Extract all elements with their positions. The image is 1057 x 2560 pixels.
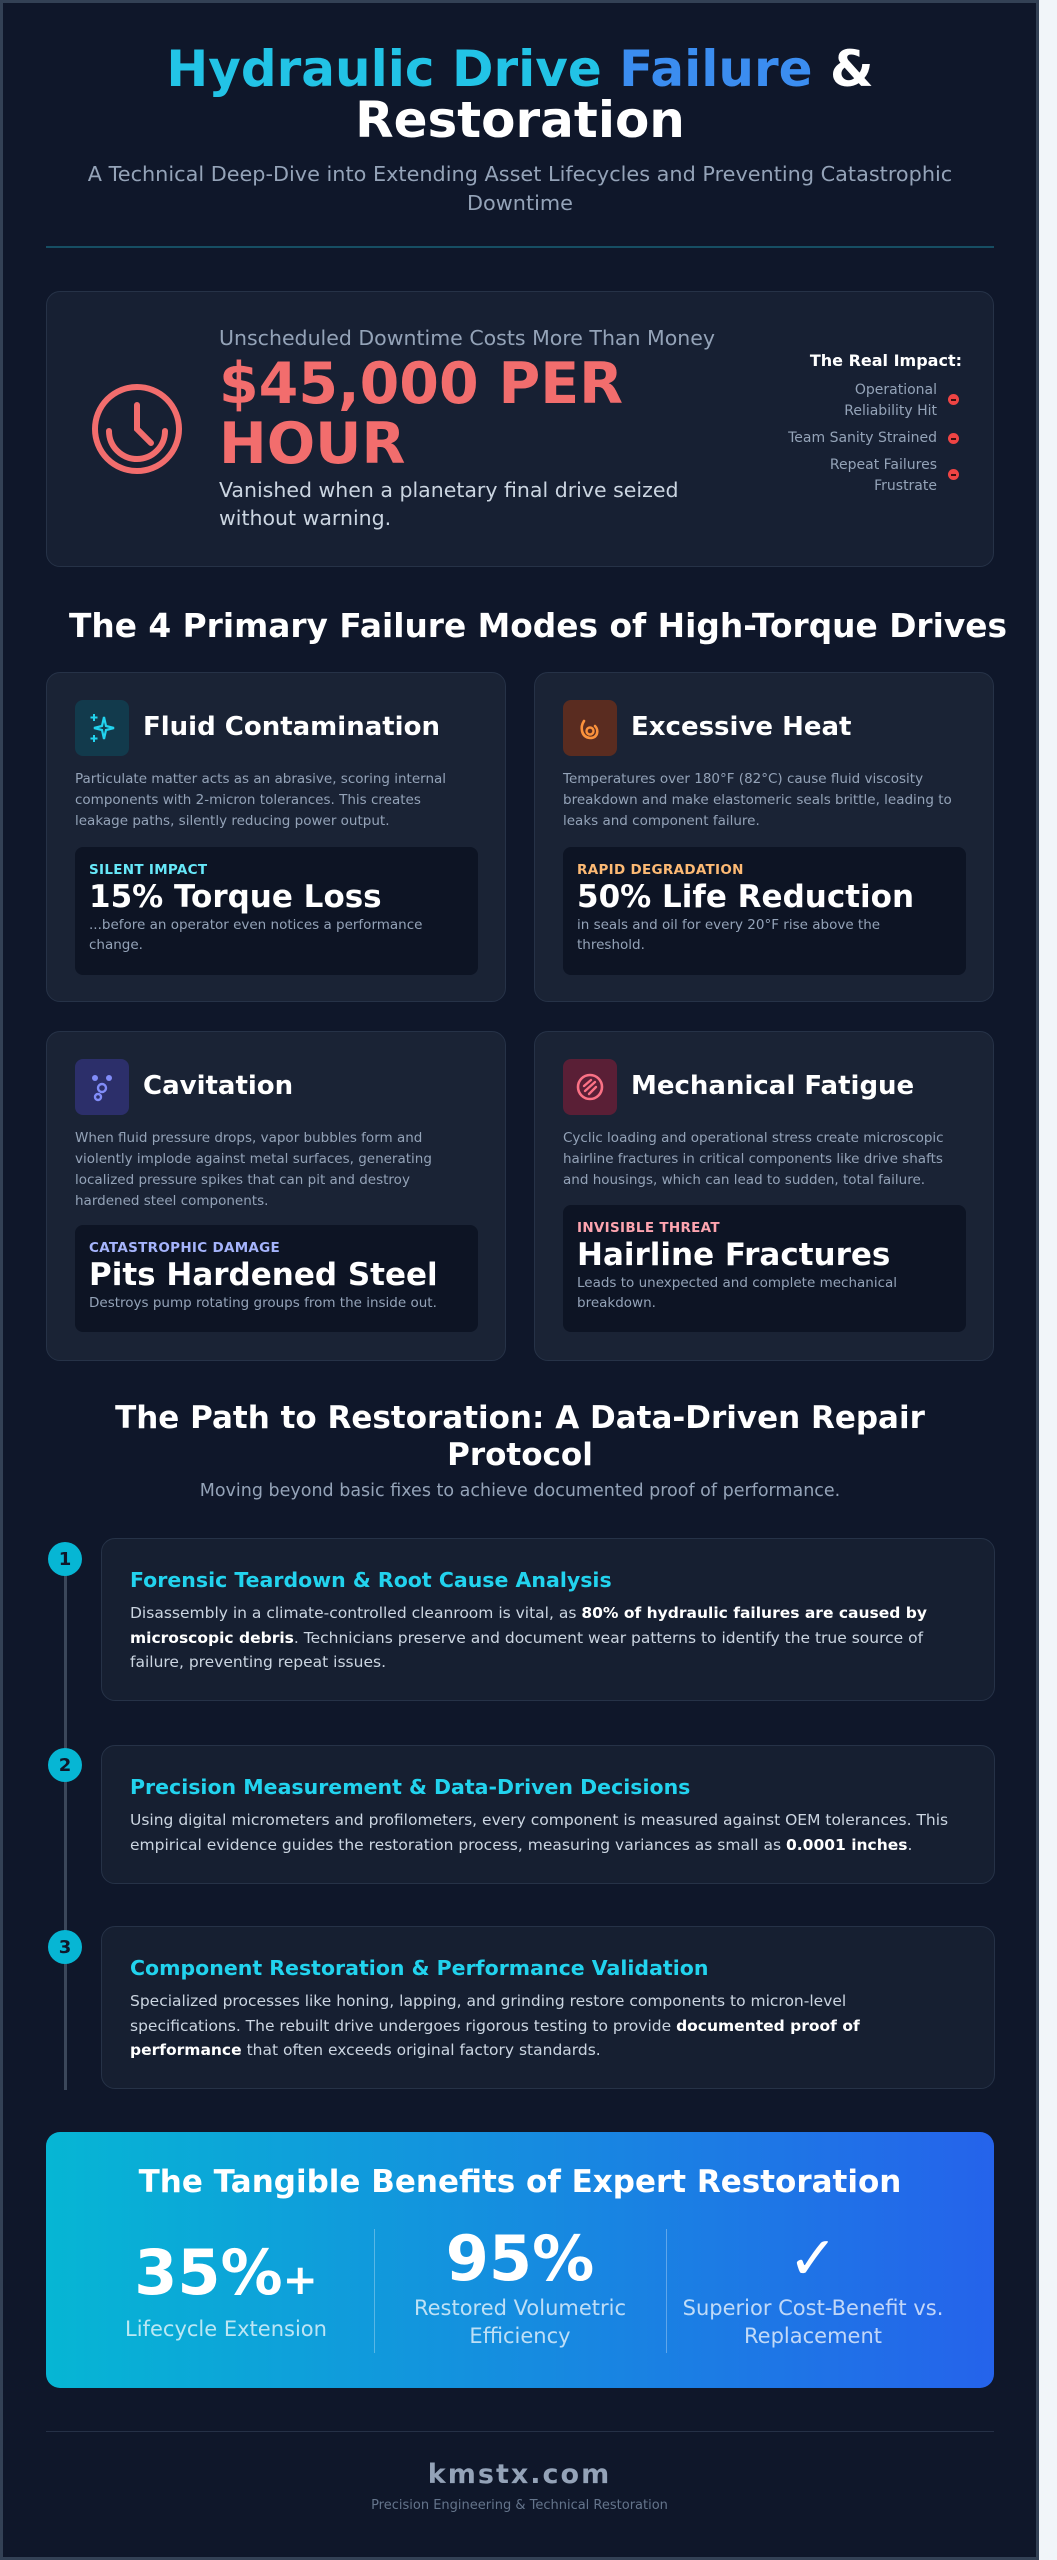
panel: fluid contamination: Fluid Contamination (143, 712, 440, 742)
callout: catastrophic damage: CATASTROPHIC DAMAGE (89, 1240, 280, 1256)
stat: volumetric efficiency (414, 2222, 626, 2348)
list: the real impact: Operational (855, 382, 937, 398)
panel: cavitation: Cavitation (143, 1071, 293, 1101)
callout: silent impact: 15% Torque Loss (89, 879, 382, 915)
callout: rapid degradation (563, 847, 966, 975)
callout: catastrophic damage: Destroys pump rotating groups from the inside out. (89, 1295, 437, 1311)
stat: lifecycle extension: 35%+ (134, 2236, 318, 2309)
callout: silent impact: ...before an operator even notices a performance change. (89, 917, 422, 953)
callout: rapid degradation: in seals and oil for every 20°F rise above the threshold. (577, 917, 880, 953)
step 3 marker (48, 1930, 82, 1964)
icon: bubbles (75, 1059, 129, 1115)
subheading: Moving beyond basic fixes to achieve documented proof of performance. (200, 1481, 840, 1501)
icon: sparkle (75, 700, 129, 756)
step 2 card: Precision Measurement & Data-Driven Decisions (130, 1775, 690, 1799)
footer: kmstx.com (428, 2459, 611, 2490)
callout: silent impact (75, 847, 478, 975)
stat: cost-benefit: ✓ (788, 2224, 838, 2294)
step 2 marker: 2 (59, 1754, 71, 1776)
callout: silent impact: SILENT IMPACT (89, 862, 207, 878)
panel: excessive heat (534, 672, 994, 1002)
stat: lifecycle extension (125, 2236, 327, 2341)
callout: invisible threat: INVISIBLE THREAT (577, 1220, 720, 1236)
panel: mechanical fatigue (534, 1031, 994, 1361)
step 3 card: Specialized processes like honing, lapping, and grinding restore components to micron-level specifications. The rebuilt drive undergoes rigorous testing to provide documented proof of performance that often exceeds original factory standards. (130, 1992, 860, 2059)
footer (371, 2459, 668, 2513)
heading: failure modes: The 4 Primary Failure Modes of High-Torque Drives (69, 607, 1007, 645)
step 1 marker (48, 1542, 82, 1576)
subtitle: A Technical Deep-Dive into Extending Asset Lifecycles and Preventing Catastrophic Downtime (88, 162, 952, 215)
panel: cavitation: When fluid pressure drops, vapor bubbles form and violently implode against metal surfaces, generating localized pressure spikes that can pit and destroy hardened steel components. (75, 1130, 432, 1209)
stat: cost-benefit (683, 2224, 943, 2348)
callout: invisible threat: Leads to unexpected and complete mechanical breakdown. (577, 1275, 897, 1311)
stat: volumetric efficiency: Restored Volumetric Efficiency (414, 2296, 626, 2348)
step 1 card: Forensic Teardown & Root Cause Analysis (130, 1568, 612, 1592)
heading: path to restoration: The Path to Restoration: A Data-Driven Repair Protocol (115, 1400, 925, 1473)
list: the real impact: Frustrate (874, 478, 937, 494)
panel: cavitation (46, 1031, 506, 1361)
hero text: Vanished when a planetary final drive seized without warning. (219, 478, 678, 530)
step 1 marker: 1 (59, 1548, 71, 1570)
footer: Precision Engineering & Technical Restoration (371, 2498, 668, 2513)
list: the real impact: Team Sanity Strained (788, 430, 937, 446)
step 1 card (101, 1538, 995, 1701)
panel: excessive heat: Temperatures over 180°F (82°C) cause fluid viscosity breakdown and make elastomeric seals brittle, leading to leaks and component failure. (563, 771, 952, 829)
callout: rapid degradation: 50% Life Reduction (577, 879, 914, 915)
panel: fluid contamination (46, 672, 506, 1002)
benefits title: The Tangible Benefits of Expert Restoration (139, 2164, 901, 2200)
panel: downtime cost hero (46, 291, 994, 567)
step 2 marker (48, 1748, 82, 1782)
callout: catastrophic damage: Pits Hardened Steel (89, 1257, 438, 1293)
step 3 card: Component Restoration & Performance Validation (130, 1956, 708, 1980)
hero text (219, 326, 715, 530)
icon: flame (563, 700, 617, 756)
list: the real impact: Reliability Hit (844, 403, 937, 419)
step 2 card: Using digital micrometers and profilometers, every component is measured against OEM tolerances. This empirical evidence guides the restoration process, measuring variances as small as 0.0001 inches. (130, 1811, 948, 1854)
panel: fluid contamination: Particulate matter acts as an abrasive, scoring internal components with 2-micron tolerances. This creates leakage paths, silently reducing power output. (75, 771, 446, 829)
list: the real impact: Repeat Failures (830, 457, 937, 473)
panel: benefits (46, 2132, 994, 2388)
callout: invisible threat: Hairline Fractures (577, 1237, 890, 1273)
step 1 card: Disassembly in a climate-controlled cleanroom is vital, as 80% of hydraulic failures are caused by microscopic debris. Technicians preserve and document wear patterns to identify the true source of failure, preventing repeat issues. (130, 1604, 927, 1671)
panel: mechanical fatigue: Cyclic loading and operational stress create microscopic hairline fractures in critical components like drive shafts and housings, which can lead to sudden, total failure. (563, 1130, 944, 1188)
hero text: $45,000 PER HOUR (219, 351, 623, 477)
icon: fracture (563, 1059, 617, 1115)
step 2 card (101, 1745, 995, 1884)
list: the real impact (788, 351, 962, 494)
callout: catastrophic damage (75, 1225, 478, 1332)
title: Restoration (355, 91, 685, 149)
panel: excessive heat: Excessive Heat (631, 712, 851, 742)
step 3 card (101, 1926, 995, 2089)
step 3 marker: 3 (59, 1936, 71, 1958)
callout: rapid degradation: RAPID DEGRADATION (577, 862, 744, 878)
stat: volumetric efficiency: 95% (446, 2222, 594, 2295)
list: the real impact: The Real Impact: (810, 351, 962, 370)
icon: clock (92, 384, 182, 474)
stat: lifecycle extension: Lifecycle Extension (125, 2317, 327, 2341)
title: Hydraulic Drive Failure & (166, 40, 874, 98)
callout: invisible threat (563, 1205, 966, 1332)
title (166, 40, 874, 149)
stat: cost-benefit: Superior Cost-Benefit vs. Replacement (683, 2296, 943, 2348)
hero text: Unscheduled Downtime Costs More Than Money (219, 326, 715, 350)
panel: mechanical fatigue: Mechanical Fatigue (631, 1071, 914, 1101)
